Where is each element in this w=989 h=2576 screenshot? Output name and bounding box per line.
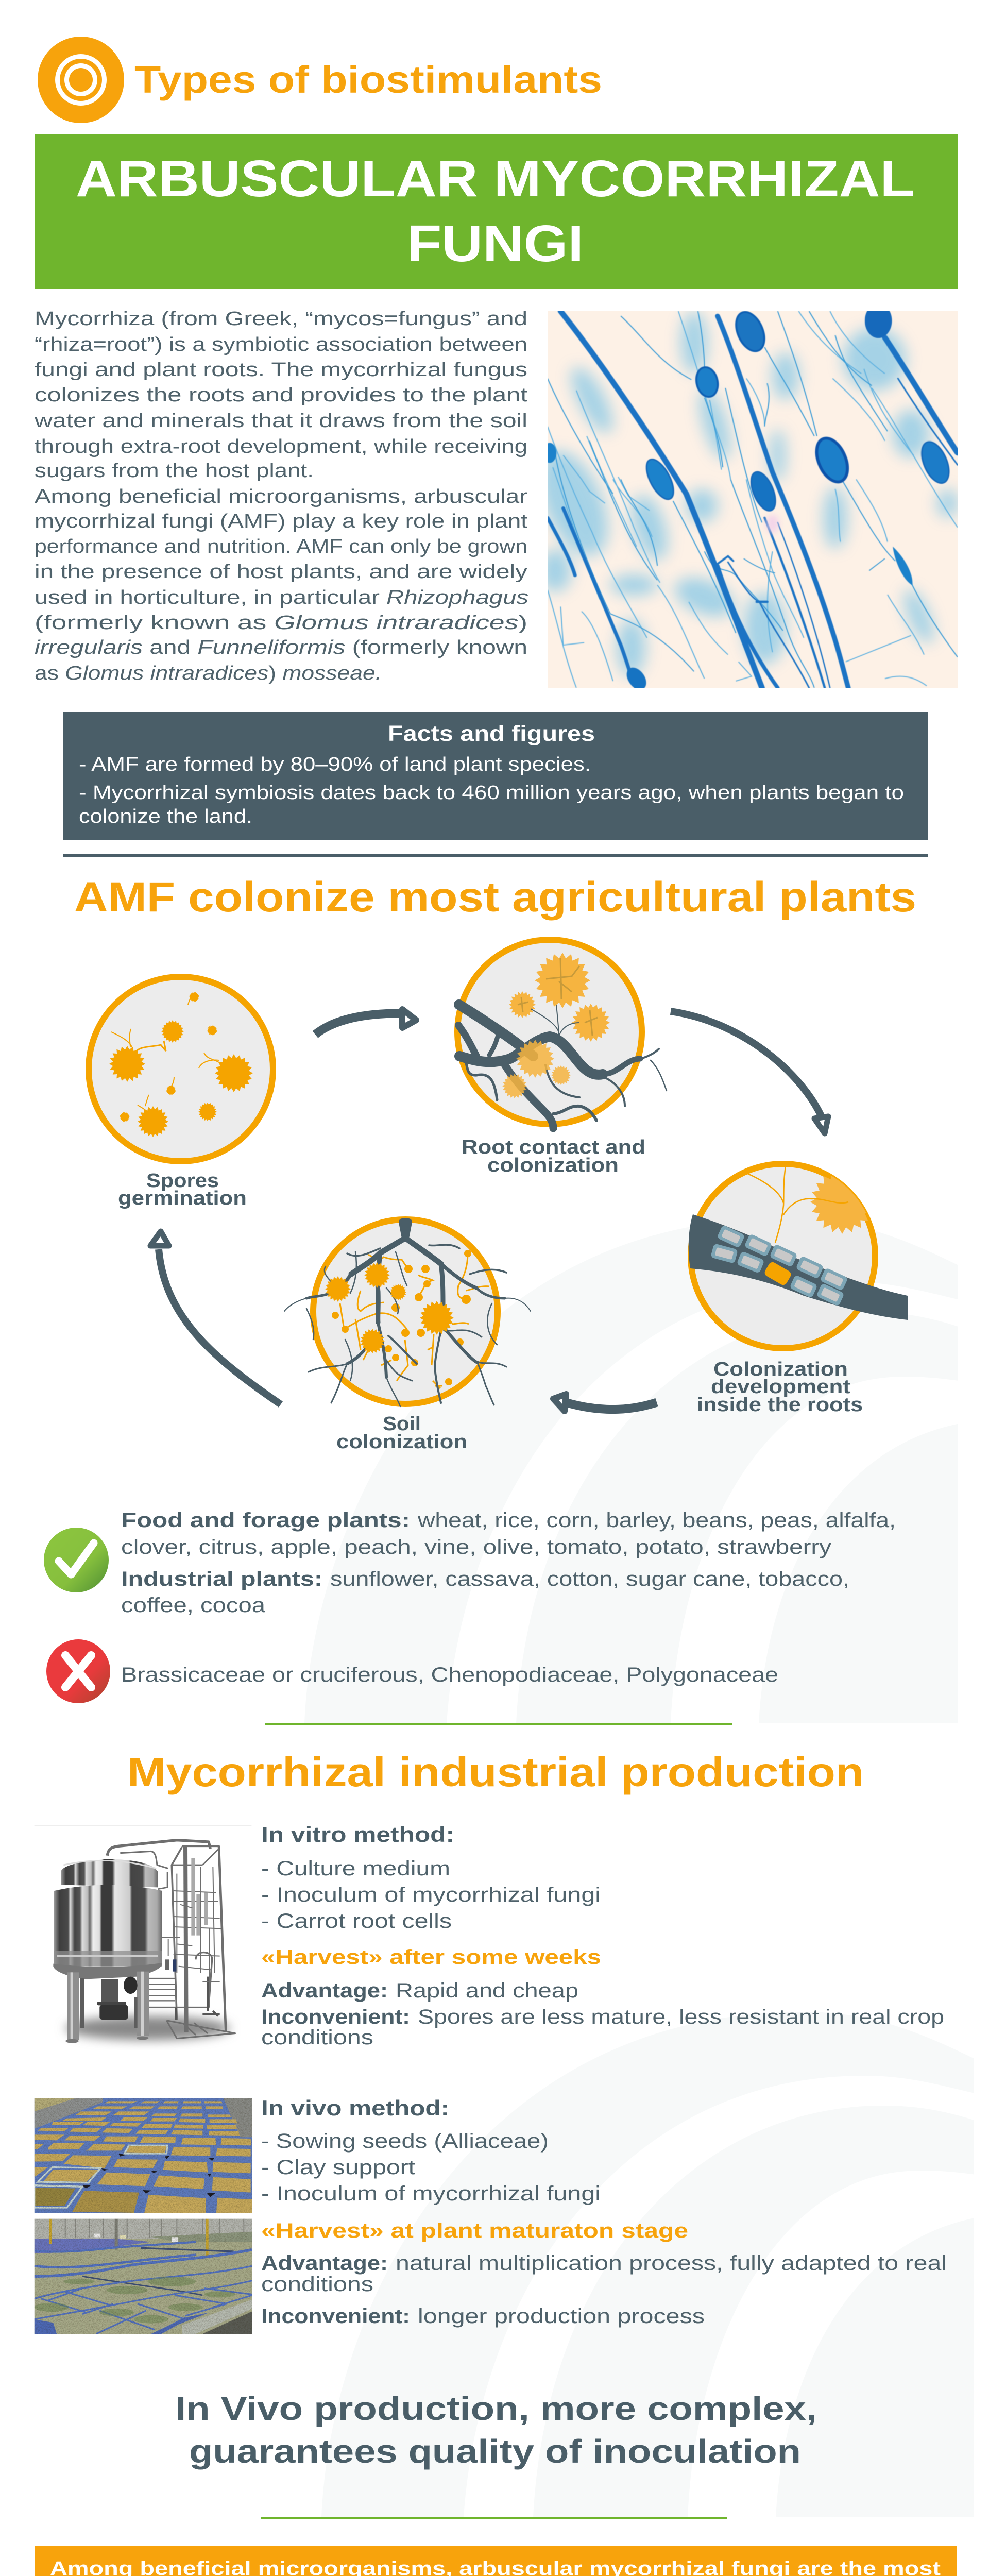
- stage 4: soil colonization: [284, 1219, 531, 1406]
- intro text block: mycorrhizal fungi (AMF) play a key role in plant: [35, 511, 528, 532]
- compatible plants list: Industrial plants:: [121, 1568, 322, 1590]
- stage 1: spores germination: [89, 977, 273, 1161]
- compatible plants list: [121, 1509, 896, 1617]
- icon: green check: [44, 1528, 109, 1592]
- photos: in vivo trays: [34, 2098, 252, 2334]
- intro text block: Among beneficial microorganisms, arbuscular: [35, 486, 527, 507]
- heading: mycorrhizal industrial production: Mycorrhizal industrial production: [127, 1749, 864, 1795]
- label: spores germination: Spores: [146, 1170, 219, 1192]
- panel: facts and figures: - Mycorrhizal symbiosis dates back to 460 million years ago, when plants began to: [79, 782, 904, 804]
- label: colonization development inside the roots: development: [711, 1376, 850, 1398]
- photo: seedlings in greenhouse: [35, 2219, 252, 2334]
- arrow: root contact to colonization development: [671, 1011, 828, 1133]
- label: soil colonization: colonization: [336, 1431, 467, 1453]
- heading: AMF colonize most agricultural plants: AMF colonize most agricultural plants: [74, 874, 916, 921]
- category heading: Types of biostimulants: [134, 58, 602, 101]
- in vitro method text: Rapid and cheap: [396, 1979, 578, 2002]
- conclusion heading: in vivo quality: In Vivo production, more complex,: [175, 2390, 817, 2427]
- in vivo method text: In vivo method:: [261, 2096, 449, 2120]
- in vitro method text: «Harvest» after some weeks: [261, 1946, 601, 1969]
- label: colonization development inside the roots: inside the roots: [697, 1394, 863, 1416]
- in vivo method text: natural multiplication process, fully adapted to real: [396, 2252, 947, 2275]
- arrow: colonization development to soil colonization: [553, 1394, 657, 1411]
- in vitro method text: [261, 1822, 944, 2049]
- non-host plants text: Brassicaceae or cruciferous, Chenopodiaceae, Polygonaceae: [121, 1664, 778, 1686]
- stage 2: root contact and colonization: [457, 940, 667, 1128]
- intro text block: sugars from the host plant.: [35, 460, 314, 482]
- panel: orange summary: [35, 2546, 957, 2576]
- label: root contact and colonization: Root contact and: [462, 1137, 645, 1158]
- intro text block: (formerly known as Glomus intraradices ): [35, 612, 527, 634]
- in vitro method text: Advantage:: [261, 1979, 388, 2002]
- photo: in vitro bioreactor: [34, 1825, 251, 2047]
- stage 3: colonization development inside the roots: [689, 1164, 908, 1348]
- intro text block: “rhiza=root”) is a symbiotic association between: [35, 334, 527, 355]
- photo: stained mycorrhizal root under microscope: [548, 311, 958, 688]
- diagram: AMF life cycle: [89, 940, 908, 1453]
- in vivo method text: - Clay support: [261, 2156, 415, 2179]
- in vivo method text: Advantage:: [261, 2252, 388, 2275]
- label: soil colonization: [336, 1413, 467, 1453]
- in vivo method text: - Sowing seeds (Alliaceae): [261, 2130, 549, 2153]
- conclusion heading: in vivo quality: [175, 2390, 817, 2470]
- label: spores germination: [118, 1170, 247, 1209]
- label: spores germination: germination: [118, 1188, 247, 1209]
- in vivo method text: conditions: [261, 2273, 373, 2296]
- icon: red cross: [46, 1639, 110, 1703]
- photo: trays of substrate: [35, 2098, 252, 2213]
- compatible plants list: wheat, rice, corn, barley, beans, peas, alfalfa,: [417, 1509, 896, 1532]
- icon: orange target: [38, 37, 124, 123]
- panel: facts and figures: - AMF are formed by 80–90% of land plant species.: [79, 754, 591, 775]
- intro text block: irregularis and Funneliformis (formerly known: [35, 637, 527, 658]
- title banner: [35, 134, 958, 289]
- compatible plants list: Food and forage plants:: [121, 1509, 410, 1532]
- background watermark arcs, lower: [321, 2012, 989, 2517]
- in vivo method text: «Harvest» at plant maturaton stage: [261, 2219, 688, 2242]
- intro text block: as Glomus intraradices ) mosseae.: [35, 663, 382, 684]
- panel: facts and figures: Facts and figures: [388, 721, 595, 746]
- background watermark arcs, upper: [304, 1218, 972, 1723]
- in vivo method text: Inconvenient:: [261, 2305, 410, 2328]
- intro text block: used in horticulture, in particular Rhizophagus: [35, 587, 528, 608]
- intro text block: performance and nutrition. AMF can only be grown: [35, 536, 527, 557]
- arrow: soil colonization to spores: [150, 1231, 281, 1404]
- in vivo method text: longer production process: [418, 2305, 705, 2328]
- in vitro method text: - Culture medium: [261, 1857, 450, 1880]
- in vitro method text: Inconvenient:: [261, 2006, 410, 2028]
- in vitro method text: In vitro method:: [261, 1822, 454, 1846]
- intro text block: through extra-root development, while receiving: [35, 436, 527, 457]
- compatible plants list: clover, citrus, apple, peach, vine, olive, tomato, potato, strawberry: [121, 1536, 831, 1558]
- arrow: germination to root contact: [315, 1009, 416, 1035]
- intro text block: fungi and plant roots. The mycorrhizal fungus: [35, 359, 527, 381]
- label: colonization development inside the roots: Colonization: [713, 1359, 848, 1380]
- panel: facts and figures: colonize the land.: [79, 806, 252, 827]
- intro text block: colonizes the roots and provides to the plant: [35, 384, 528, 406]
- in vitro method text: - Carrot root cells: [261, 1910, 452, 1933]
- label: root contact and colonization: [462, 1137, 645, 1176]
- in vivo method text: [261, 2096, 947, 2328]
- conclusion heading: in vivo quality: guarantees quality of inoculation: [189, 2433, 801, 2470]
- title banner: FUNGI: [407, 215, 584, 273]
- intro text block: [34, 308, 528, 684]
- label: root contact and colonization: colonization: [487, 1155, 619, 1176]
- in vitro method text: Spores are less mature, less resistant in real crop: [418, 2006, 944, 2028]
- compatible plants list: coffee, cocoa: [121, 1594, 266, 1617]
- title banner: ARBUSCULAR MYCORRHIZAL: [76, 150, 915, 208]
- intro text block: in the presence of host plants, and are widely: [35, 561, 527, 583]
- in vitro method text: - Inoculum of mycorrhizal fungi: [261, 1884, 601, 1906]
- in vitro method text: conditions: [261, 2026, 373, 2049]
- label: soil colonization: Soil: [383, 1413, 421, 1435]
- label: colonization development inside the roots: [697, 1359, 863, 1416]
- intro text block: water and minerals that it draws from the soil: [34, 410, 527, 432]
- panel: facts and figures: [63, 712, 928, 840]
- intro text block: Mycorrhiza (from Greek, “mycos=fungus” and: [35, 308, 527, 330]
- in vivo method text: - Inoculum of mycorrhizal fungi: [261, 2182, 601, 2205]
- compatible plants list: sunflower, cassava, cotton, sugar cane, tobacco,: [330, 1568, 849, 1590]
